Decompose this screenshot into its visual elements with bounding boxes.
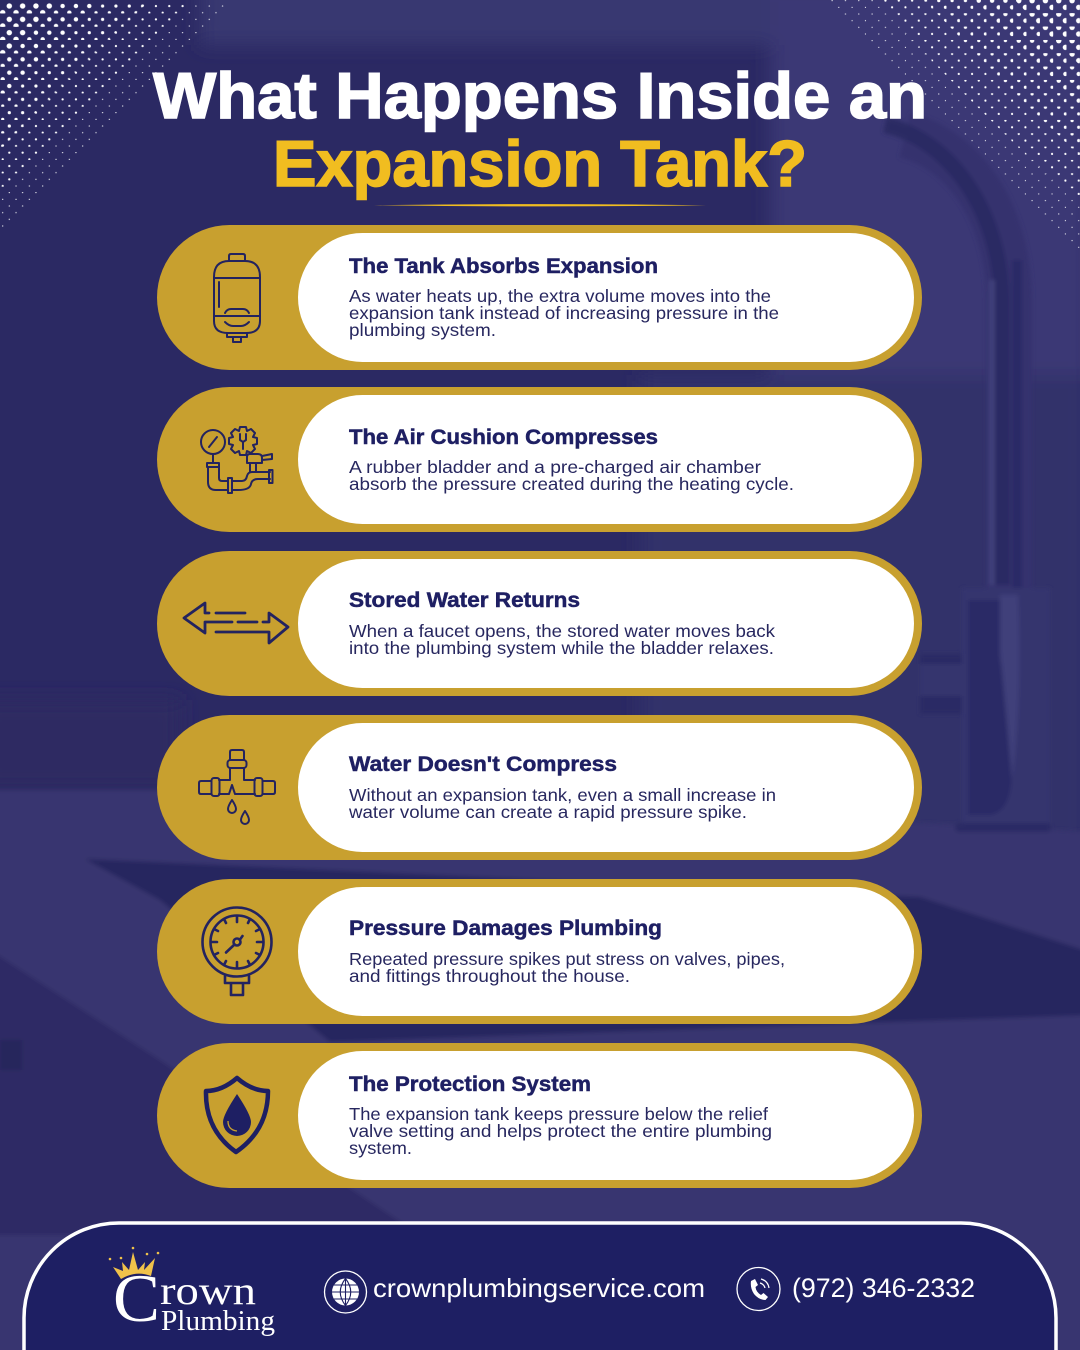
body text: into the plumbing system while the bladder relaxes. — [349, 638, 774, 658]
heading: The Protection System — [349, 1073, 591, 1096]
panel: stored water returns — [157, 551, 922, 696]
body text — [348, 785, 776, 822]
panel: pressure damages plumbing — [157, 879, 922, 1024]
heading: Pressure Damages Plumbing — [349, 917, 662, 940]
body text: and fittings throughout the house. — [349, 966, 630, 986]
body text: Without an expansion tank, even a small increase in — [349, 785, 776, 805]
body text — [349, 621, 775, 658]
icon: crown — [109, 1247, 159, 1279]
halftone dots: top left corner — [0, 0, 240, 240]
halftone dots: top right corner — [830, 0, 1080, 250]
title: Expansion Tank? — [273, 127, 807, 200]
icon: leaking pipe fitting — [199, 750, 275, 824]
footer band — [24, 1223, 1056, 1350]
icon: expansion tank — [214, 254, 260, 342]
body text: The expansion tank keeps pressure below the relief — [349, 1104, 768, 1124]
website: crownplumbingservice.com — [373, 1273, 705, 1303]
phone number: (972) 346-2332 — [792, 1273, 975, 1303]
body text — [349, 457, 794, 494]
heading: Water Doesn't Compress — [349, 753, 617, 776]
heading: The Air Cushion Compresses — [349, 426, 658, 449]
faucet neck — [885, 125, 1017, 590]
icon: two way arrows — [184, 603, 288, 643]
icon: globe — [324, 1271, 366, 1313]
body text: As water heats up, the extra volume moves into the — [349, 286, 771, 306]
wordmark: C — [113, 1260, 160, 1336]
body text: expansion tank instead of increasing pressure in the — [349, 303, 779, 323]
logo: Crown Plumbing — [109, 1247, 275, 1337]
body text — [349, 949, 785, 986]
panel: the protection system — [157, 1043, 922, 1188]
title underline — [374, 204, 706, 206]
body text: absorb the pressure created during the heating cycle. — [349, 474, 794, 494]
body text: Repeated pressure spikes put stress on valves, pipes, — [349, 949, 785, 969]
icon: phone — [737, 1268, 780, 1310]
icon: gauge, gear and pipe — [201, 427, 272, 493]
body text: water volume can create a rapid pressure spike. — [348, 802, 747, 822]
wordmark — [113, 1260, 275, 1337]
heading: The Tank Absorbs Expansion — [349, 255, 658, 278]
panel: water doesn't compress — [157, 715, 922, 860]
body text: When a faucet opens, the stored water moves back — [349, 621, 775, 641]
body text: system. — [349, 1138, 412, 1158]
title: What Happens Inside an — [153, 59, 927, 132]
body text: valve setting and helps protect the entire plumbing — [349, 1121, 772, 1141]
body text: plumbing system. — [349, 320, 496, 340]
body text — [349, 1104, 772, 1158]
panel: the air cushion compresses — [157, 387, 922, 532]
title — [153, 59, 927, 200]
wordmark: rown — [160, 1268, 256, 1313]
body text: A rubber bladder and a pre-charged air chamber — [349, 457, 761, 477]
icon: shield with water drop — [206, 1078, 268, 1152]
panel: the tank absorbs expansion — [157, 225, 922, 370]
icon: pressure gauge — [202, 908, 272, 995]
body text — [349, 286, 779, 340]
wordmark: Plumbing — [161, 1305, 275, 1337]
heading: Stored Water Returns — [349, 589, 580, 612]
faucet body and lever — [962, 588, 1050, 828]
lower counter and sink planes — [0, 790, 1080, 1350]
